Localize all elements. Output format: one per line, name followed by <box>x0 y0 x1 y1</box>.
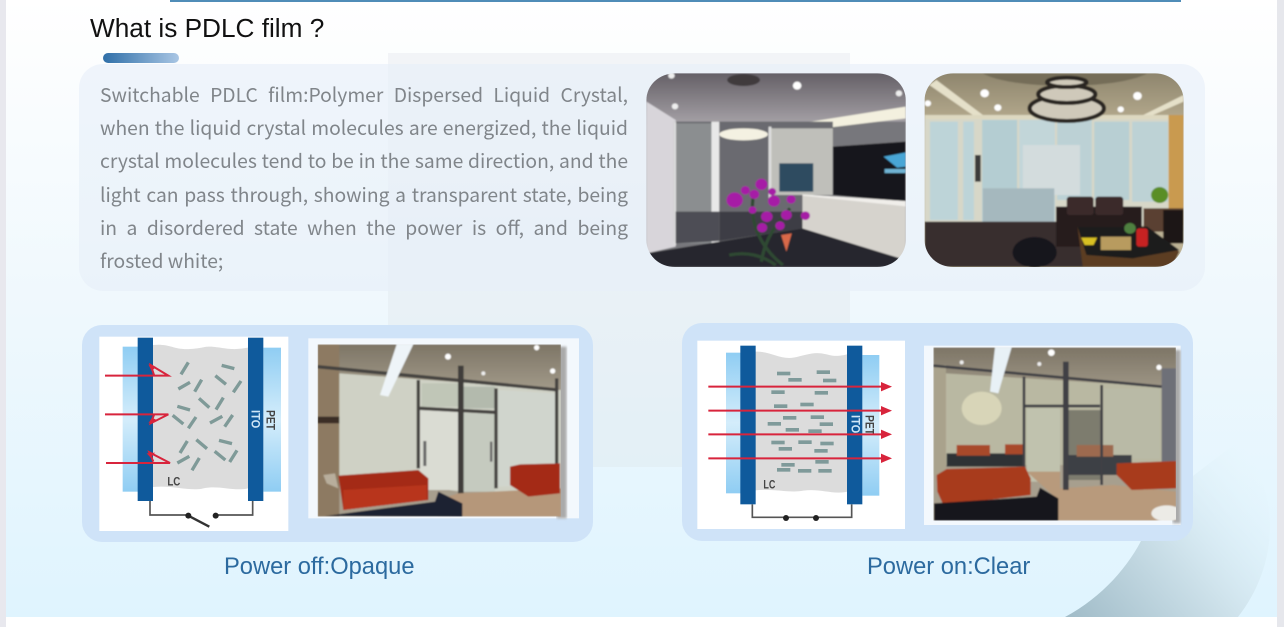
text block: PDLC description <box>100 80 628 274</box>
photo: lounge with frosted film <box>922 72 1186 272</box>
text block: PDLC description: frosted white; <box>100 246 223 274</box>
text block: PDLC description: when the liquid crystal molecules are energized, the liquid <box>100 113 628 141</box>
diagram: power off, liquid crystals scattered: ITO <box>248 410 262 429</box>
diagram: power on, liquid crystals aligned: LC <box>763 478 775 492</box>
title underline bar <box>103 53 179 63</box>
text block: PDLC description: Switchable PDLC film:Polymer Dispersed Liquid Crystal, <box>100 80 628 108</box>
diagram: power off, liquid crystals scattered: PET <box>264 410 278 430</box>
diagram: power off, liquid crystals scattered <box>99 337 288 531</box>
title: What is PDLC film ? <box>90 13 324 43</box>
diagram: power on, liquid crystals aligned <box>697 341 905 529</box>
text block: PDLC description: in a disordered state when the power is off, and being <box>100 213 628 241</box>
photo: clear office, film transparent <box>924 346 1182 525</box>
photo: office reception with clear film <box>646 73 906 267</box>
caption: power off: Power off:Opaque <box>224 554 415 580</box>
panel: text description <box>79 64 1205 291</box>
diagram: power on, liquid crystals aligned: PET <box>863 415 877 435</box>
text block: PDLC description: light can pass through, showing a transparent state, being <box>100 180 628 208</box>
caption: power on: Power on:Clear <box>867 554 1030 580</box>
panel: power off <box>82 325 593 542</box>
photo: frosted office, film opaque <box>308 338 579 518</box>
diagram: power off, liquid crystals scattered: LC <box>167 475 180 489</box>
diagram: power on, liquid crystals aligned: ITO <box>848 415 862 434</box>
text block: PDLC description: crystal molecules tend to be in the same direction, and the <box>100 146 628 174</box>
panel: power on <box>682 323 1193 541</box>
